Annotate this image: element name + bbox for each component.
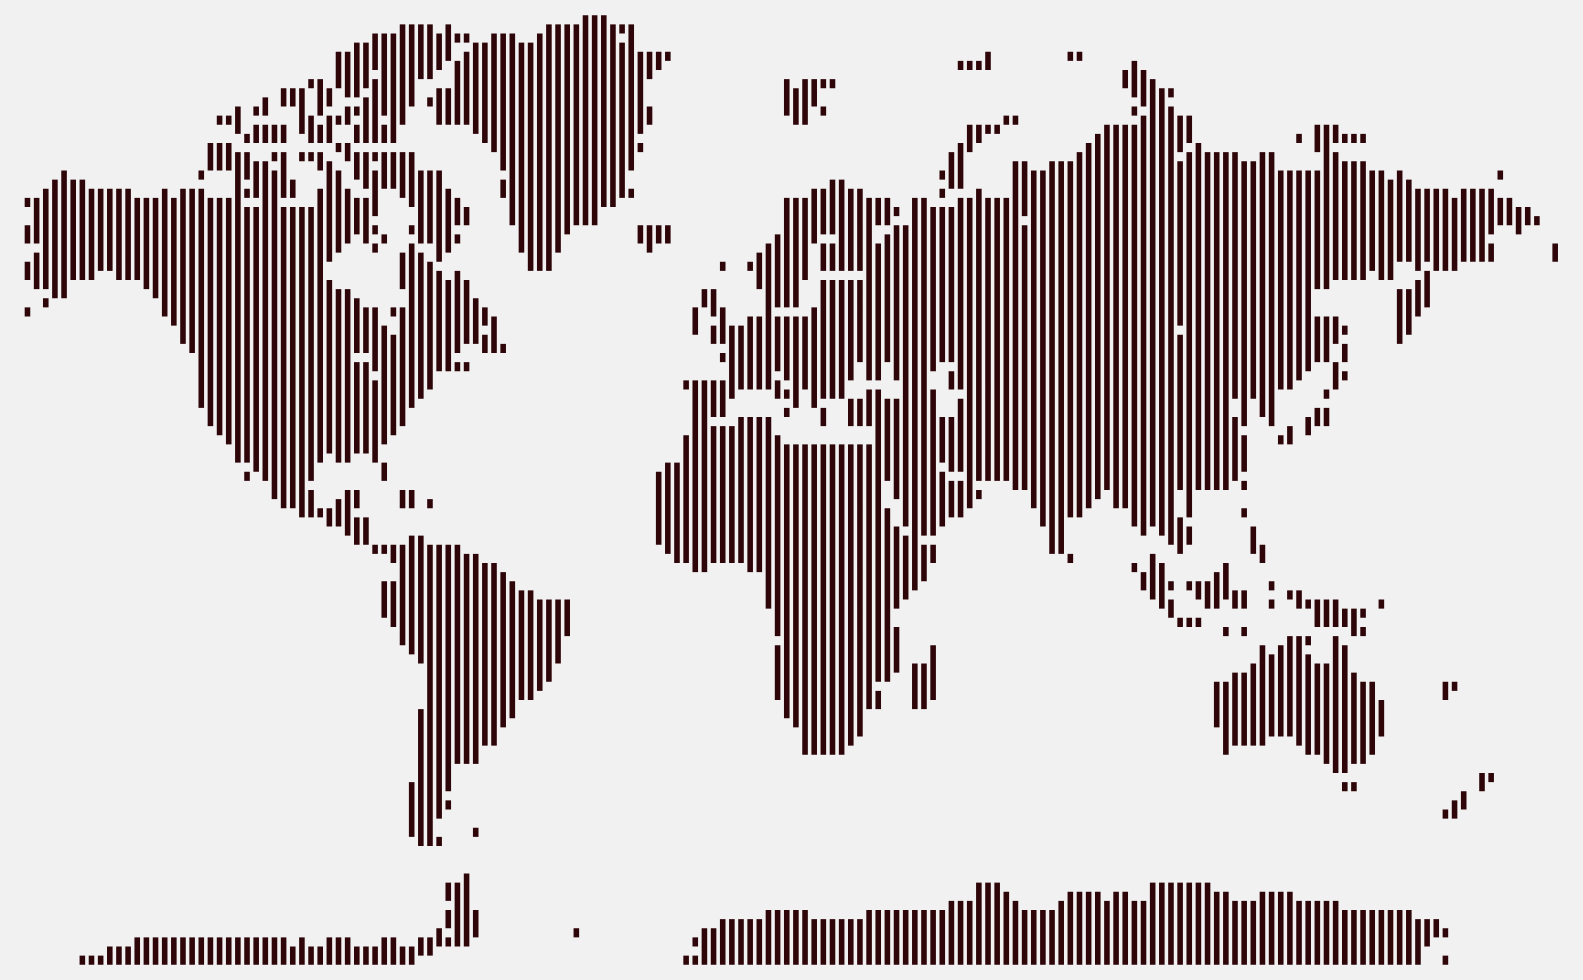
islands: New Zealand [1445, 773, 1491, 819]
islands: Franz Josef Land [961, 52, 988, 70]
islands: Svalbard [787, 79, 832, 125]
continent: Eurasia [686, 61, 1555, 590]
island: New Caledonia [1445, 682, 1455, 700]
continent: North America [27, 24, 503, 563]
island: Iceland [640, 225, 668, 253]
continent: Antarctica east [686, 883, 1445, 965]
continent: Antarctica west [82, 873, 476, 965]
continent: Africa [659, 380, 933, 755]
continent: Australia [1217, 636, 1381, 773]
islands: Severnaya Zemlya [1070, 52, 1079, 61]
island: Tasmania [1345, 782, 1354, 791]
island: South Atlantic [575, 928, 577, 937]
continent: South America [384, 536, 567, 846]
island: Madagascar [915, 645, 933, 709]
continent: Greenland [457, 15, 668, 271]
islands: Maritime Southeast Asia [1134, 554, 1381, 636]
